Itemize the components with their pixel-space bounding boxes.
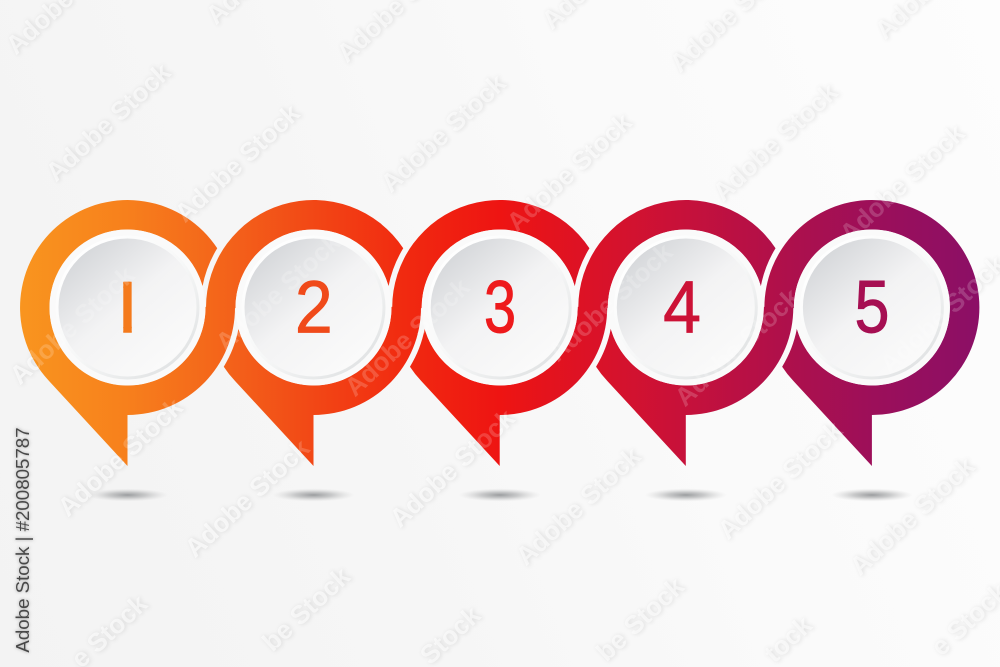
watermark text over pins: Adobe Stock <box>384 403 520 533</box>
watermark text on background: Adobe Stock <box>510 441 646 571</box>
side stock label: Adobe Stock | #200805787 <box>12 427 32 652</box>
watermark text on background: Adobe Stock <box>40 57 176 187</box>
watermark text on background: tock <box>758 610 818 667</box>
pin 4 outer white ring <box>608 230 764 386</box>
pin 3 outer white ring <box>422 230 578 386</box>
number 1: 1 <box>105 266 146 349</box>
watermark text on background: Adobe Stock <box>4 260 140 390</box>
number 5: 5 <box>855 266 889 349</box>
pin 1 rim <box>56 236 200 380</box>
pin 2 disc <box>244 238 382 376</box>
watermark text on background: Adobe Stock <box>384 403 520 533</box>
watermark text over pins: Adobe Stock <box>179 433 315 563</box>
watermark text on background: be Stock <box>590 571 690 667</box>
watermark text on background: Adobe Stock <box>501 107 637 237</box>
shadow under pin 4 <box>645 488 727 502</box>
number 4: 4 <box>663 267 701 349</box>
pin 4 <box>578 200 793 466</box>
floor shadows <box>86 488 913 502</box>
pin 3 disc <box>431 238 569 376</box>
shadow under pin 5 <box>831 488 913 502</box>
pin 2 <box>206 200 421 466</box>
number 2: 2 <box>295 267 333 349</box>
watermark text on background: Adobe Stock <box>834 118 970 248</box>
shadow under pin 2 <box>272 488 354 502</box>
pin 5 rim <box>800 236 944 380</box>
number 3: 3 <box>484 267 516 349</box>
watermark text over pins: Adobe Stock <box>4 260 140 390</box>
pin 5 disc <box>803 238 941 376</box>
watermark text on background: Adobe Stock <box>712 415 848 545</box>
watermark text on background: Adobe Stock <box>844 451 980 581</box>
shadow under pin 1 <box>86 488 168 502</box>
watermark text over pins: Adobe Stock <box>542 237 678 367</box>
pin 5 ribbon <box>764 200 979 466</box>
watermark text over pins: Adobe Stock <box>52 392 188 522</box>
watermark text on background: Adobe Stock <box>707 77 843 207</box>
watermark text over pins: Adobe Stock <box>834 118 970 248</box>
pin 5 <box>764 200 979 466</box>
watermark text over pins: Adobe Stock <box>169 98 305 228</box>
pin 5 outer white ring <box>794 230 950 386</box>
pin 1 ribbon <box>20 200 235 466</box>
watermark text over pins: Adobe Stock <box>712 415 848 545</box>
pin 4 disc <box>617 238 755 376</box>
watermark text over pins: Adobe Stock <box>339 272 475 402</box>
pin 2 outer white ring <box>236 230 392 386</box>
pin 2 ribbon <box>206 200 421 466</box>
watermark text over pins: Adobe Stock <box>210 227 346 357</box>
pin 4 rim <box>614 236 758 380</box>
watermark text on background: be Stock <box>256 561 356 657</box>
shadow under pin 3 <box>459 488 541 502</box>
pin 3 ribbon <box>392 200 607 466</box>
watermark text over pins: Adobe Stock <box>501 107 637 237</box>
watermark text on background: Adobe Stock <box>375 68 511 198</box>
watermark text on background: Adobe Stock <box>179 433 315 563</box>
pin 3 <box>392 200 607 466</box>
pin 1 outer white ring <box>50 230 206 386</box>
pin 4 ribbon <box>578 200 793 466</box>
watermark text on background: Adobe Stock <box>52 392 188 522</box>
pin 1 disc <box>58 238 196 376</box>
pin 2 rim <box>242 236 386 380</box>
pin 1 <box>20 200 235 466</box>
pin 3 rim <box>428 236 572 380</box>
watermark text on background: Adobe Stock <box>169 98 305 228</box>
watermark text over pins: Adobe Stock <box>669 282 805 412</box>
